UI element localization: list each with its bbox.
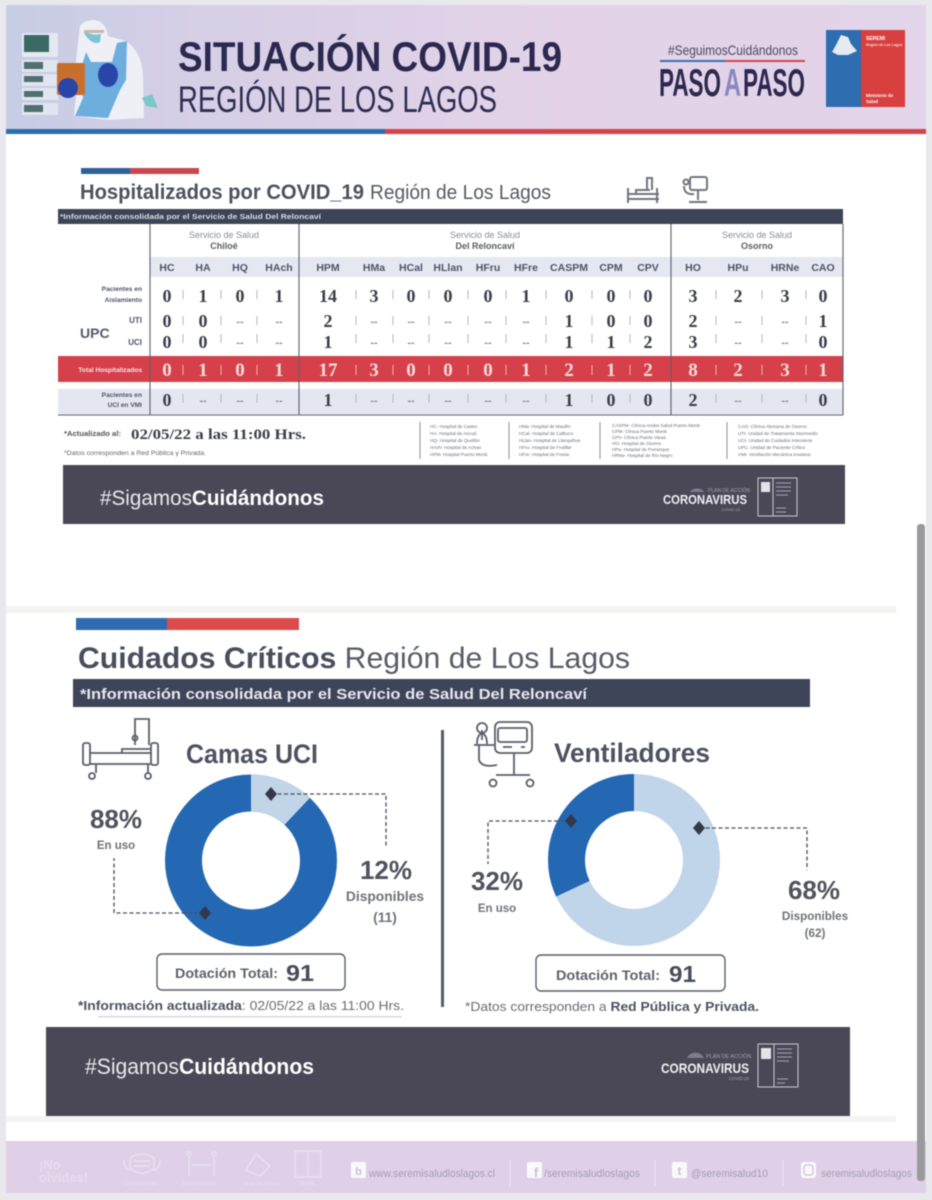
campaign logo: Paso a Paso: PASO	[743, 62, 805, 105]
legend of abbreviations: HFru- Hospital de Frutillar	[519, 445, 572, 450]
row: UCI: --	[484, 337, 492, 349]
icon: ventilate window	[295, 1151, 321, 1177]
column codes: HFru	[476, 262, 500, 274]
row: pacientes en UCI en VMI: --	[734, 395, 742, 407]
service headers: Servicio de Salud	[189, 230, 259, 240]
social: instagram	[801, 1162, 912, 1180]
update note: 02/05/22 a las 11:00 Hrs.	[131, 427, 306, 443]
row: pacientes en aislamiento: 3	[688, 286, 698, 306]
row: UTI: 1	[564, 311, 574, 331]
logo: SEREMI Ministerio de Salud: SEREMI	[866, 36, 886, 42]
icon captions: Lavar tus manos	[243, 1181, 280, 1187]
logo: SEREMI Ministerio de Salud: Ministerio de	[866, 93, 894, 98]
icon: mask	[124, 1154, 160, 1173]
row: UTI: --	[522, 316, 530, 328]
title	[178, 32, 562, 120]
logo: plan de acción coronavirus	[661, 1044, 798, 1087]
column codes: HA	[195, 262, 211, 274]
row: UTI: --	[734, 316, 742, 328]
subtitle: REGIÓN DE LOS LAGOS	[178, 79, 497, 120]
callout: 88% en uso	[90, 804, 211, 920]
campaign logo: Paso a Paso: PASO	[659, 62, 721, 105]
row labels: Total Hospitalizados	[78, 367, 142, 374]
legend of abbreviations: HAch- Hospital de Achao	[430, 445, 482, 450]
legend of abbreviations: UCI- Unidad de Cuidados Intensivos	[738, 438, 813, 443]
row: total hospitalizados: 17	[318, 360, 338, 381]
service headers	[189, 230, 792, 251]
row: UTI: --	[484, 316, 492, 328]
icon: distance	[187, 1152, 216, 1176]
logo: plan de acción coronavirus: PLAN DE ACCIÓN	[708, 487, 750, 494]
legend of abbreviations: CAO- Clínica Alemana de Osorno	[738, 424, 807, 429]
icon: ICU bed	[83, 719, 158, 779]
row: pacientes en aislamiento: 0	[236, 286, 244, 306]
column codes: CASPM	[550, 262, 588, 274]
row: pacientes en aislamiento: 1	[198, 286, 208, 306]
box: dotación total 91	[157, 954, 345, 990]
row: pacientes en aislamiento: 0	[162, 286, 172, 306]
service headers: Osorno	[741, 241, 773, 251]
social: twitter: @seremisalud10	[691, 1168, 768, 1180]
column codes: HQ	[232, 262, 248, 274]
logo: plan de acción coronavirus: CORONAVIRUS	[661, 1060, 749, 1076]
logo: plan de acción coronavirus: CORONAVIRUS	[663, 492, 747, 507]
social: facebook: f	[534, 1165, 539, 1180]
row: pacientes en UCI en VMI: 0	[644, 390, 652, 410]
legend of abbreviations: CASPM- Clínica Andes Salud Puerto Montt	[612, 423, 701, 428]
legend of abbreviations: HPM- Hospital Puerto Montt	[430, 452, 488, 457]
row: pacientes en aislamiento: 0	[484, 286, 492, 306]
legend of abbreviations: HPu- Hospital de Purranque	[612, 447, 670, 452]
legend of abbreviations: VMI- Ventilación Mecánica Invasiva	[738, 452, 811, 457]
row: total hospitalizados: 2	[733, 360, 743, 381]
icon captions: Distancia física	[182, 1181, 216, 1187]
row: pacientes en UCI en VMI: --	[275, 395, 283, 407]
column codes: HLlan	[433, 262, 463, 274]
row: pacientes en UCI en VMI: --	[444, 395, 452, 407]
heading: camas UCI: Camas UCI	[186, 739, 318, 769]
logo: SEREMI Ministerio de Salud: Región de Los Lagos	[866, 43, 902, 47]
social: facebook: /seremisaludloslagos	[544, 1168, 640, 1180]
divider between charts	[441, 730, 444, 1007]
row: UCI: --	[407, 337, 415, 349]
legend of abbreviations: HRNe- Hospital de Río Negro	[612, 453, 673, 458]
row labels	[78, 286, 142, 409]
row: UCI: --	[444, 337, 452, 349]
row labels: Pacientes en	[102, 286, 142, 293]
panel: cuidados críticos section	[46, 618, 850, 1116]
social: facebook	[527, 1162, 640, 1180]
panel: hospitalizados table section	[58, 168, 845, 524]
row: pacientes en UCI en VMI: --	[781, 395, 789, 407]
row: pacientes en UCI en VMI: 0	[162, 390, 172, 410]
banner: sigamos cuidándonos 1: #SigamosCuidándonos	[100, 487, 324, 510]
column codes: HCal	[399, 262, 423, 274]
row: total hospitalizados: 0	[443, 360, 453, 381]
legend of abbreviations: HMa- Hospital de Maullín	[519, 424, 571, 429]
column codes: CAO	[811, 262, 835, 274]
update note: *Actualizado al:	[64, 431, 121, 438]
callout: 68% disponibles	[693, 821, 849, 940]
row: pacientes en UCI en VMI: --	[484, 395, 492, 407]
row: UCI: 0	[198, 332, 208, 352]
row: total hospitalizados: 1	[274, 360, 284, 381]
row: pacientes en aislamiento: 2	[734, 286, 742, 306]
row: total hospitalizados: 1	[606, 360, 616, 381]
row: pacientes en UCI en VMI: 0	[606, 390, 616, 410]
update note: *Datos corresponden a Red Pública y Privada.	[64, 450, 206, 457]
row: total hospitalizados: 0	[406, 360, 416, 381]
row: total hospitalizados: 8	[688, 360, 698, 381]
column codes: HFre	[514, 262, 538, 274]
reminder: no olvides: ¡No	[39, 1157, 61, 1172]
row: pacientes en UCI en VMI: --	[199, 395, 207, 407]
column codes: CPM	[599, 262, 623, 274]
banner: sigamos cuidándonos 2	[46, 1027, 850, 1116]
campaign logo: Paso a Paso	[659, 42, 805, 105]
row: total hospitalizados: 2	[643, 360, 653, 381]
row: pacientes en aislamiento: 0	[644, 286, 652, 306]
donut chart: camas UCI	[184, 793, 318, 928]
row: UTI	[162, 311, 828, 331]
row: UTI: 0	[198, 311, 208, 331]
row: pacientes en aislamiento: 1	[274, 286, 284, 306]
column codes: HC	[159, 262, 175, 274]
row: UCI: --	[236, 337, 244, 349]
row: UCI: --	[370, 337, 378, 349]
heading: hospitalizados: Hospitalizados por COVID_19	[80, 181, 364, 204]
icon: hospital bed	[628, 178, 659, 203]
reminder: no olvides: olvides!	[39, 1170, 88, 1185]
callout: 88% en uso: 88%	[90, 804, 142, 834]
service headers: Chiloé	[210, 241, 238, 251]
row labels: UCI	[128, 338, 142, 347]
box: dotación total 91: 91	[669, 961, 696, 987]
icon: hand wash	[246, 1154, 270, 1176]
box: dotación total 91	[536, 955, 725, 991]
callout: 12% disponibles: (11)	[373, 910, 397, 925]
title: SITUACIÓN COVID-19	[178, 32, 562, 80]
row: total hospitalizados: 3	[369, 360, 379, 381]
legend of abbreviations: UTI- Unidad de Tratamiento Intermedio	[738, 431, 818, 436]
callout: 32% en uso	[471, 814, 577, 915]
row: pacientes en aislamiento: 0	[606, 286, 616, 306]
box: dotación total 91: Dotación Total:	[175, 965, 278, 981]
heading: cuidados críticos: Cuidados Críticos Región de Los Lagos	[78, 642, 630, 675]
row: pacientes en aislamiento: 0	[406, 286, 416, 306]
row: UCI: 1	[606, 332, 616, 352]
column codes: HMa	[363, 262, 385, 274]
row labels: UPC	[80, 325, 110, 341]
legend of abbreviations: HO- Hospital de Osorno	[612, 441, 661, 446]
row: UCI: 1	[564, 332, 574, 352]
footnote: información actualizada: *Información actualizada : 02/05/22 a las 11:00 Hrs.	[78, 998, 404, 1013]
row: pacientes en aislamiento: 0	[818, 286, 828, 306]
icon captions	[125, 1181, 315, 1187]
header rule blue and red	[6, 129, 926, 134]
row: pacientes en aislamiento: 0	[444, 286, 452, 306]
info bar: table note: *Información consolidada por el Servicio de Salud Del Reloncaví	[60, 212, 322, 221]
row: UCI: --	[734, 337, 742, 349]
row: UCI	[162, 332, 828, 352]
callout: 68% disponibles: (62)	[805, 927, 825, 940]
column codes: HAch	[265, 262, 293, 274]
box: dotación total 91: Dotación Total:	[556, 967, 660, 983]
row: total hospitalizados: 1	[198, 360, 208, 381]
row: pacientes en UCI en VMI: 0	[818, 390, 828, 410]
row: total hospitalizados: 0	[235, 360, 245, 381]
footer band	[6, 1141, 926, 1193]
illustration: health worker with monitors	[22, 20, 158, 120]
callout: 12% disponibles	[265, 787, 424, 925]
row labels: Pacientes en	[102, 392, 142, 399]
row: UCI: 3	[688, 332, 698, 352]
row: UTI: 2	[324, 311, 332, 331]
row: total hospitalizados: 1	[818, 360, 828, 381]
service headers: Servicio de Salud	[450, 230, 520, 240]
social: website: b	[355, 1166, 362, 1178]
logo: plan de acción coronavirus: PLAN DE ACCIÓN	[706, 1053, 751, 1060]
row: pacientes en aislamiento: 3	[780, 286, 790, 306]
section accent bar	[76, 618, 299, 630]
row: total hospitalizados: 0	[483, 360, 493, 381]
row: UTI: 0	[606, 311, 616, 331]
column codes: CPV	[637, 262, 659, 274]
row: pacientes en UCI en VMI: --	[407, 395, 415, 407]
row: UTI: 0	[644, 311, 652, 331]
row: UCI: --	[522, 337, 530, 349]
row: UTI: --	[781, 316, 789, 328]
heading: hospitalizados: Región de Los Lagos	[370, 182, 551, 204]
logo: plan de acción coronavirus: COVID-19	[729, 1076, 750, 1081]
service headers: Del Reloncaví	[455, 241, 515, 251]
row: UTI: 2	[688, 311, 698, 331]
social: twitter	[672, 1162, 768, 1180]
row: total hospitalizados	[162, 360, 828, 381]
logo: plan de acción coronavirus	[663, 478, 797, 516]
logo: SEREMI Ministerio de Salud: Salud	[866, 99, 878, 104]
legend of abbreviations: UPC- Unidad de Paciente Crítico	[738, 445, 806, 450]
row: pacientes en UCI en VMI	[162, 390, 828, 410]
legend of abbreviations: HQ- Hospital de Quellón	[430, 438, 480, 443]
callout: 12% disponibles: 12%	[360, 855, 412, 885]
callout: 68% disponibles: Disponibles	[782, 910, 849, 923]
row: pacientes en UCI en VMI: --	[370, 395, 378, 407]
row: UCI: --	[781, 337, 789, 349]
panel: ventiladores	[465, 722, 849, 1014]
row: pacientes en aislamiento	[162, 286, 828, 306]
icon: ventilator	[684, 177, 707, 202]
row: total hospitalizados: 3	[780, 360, 790, 381]
legend of abbreviations: CPM- Clínica Puerto Montt	[612, 429, 667, 434]
row: UCI: 0	[162, 332, 172, 352]
row: UTI: --	[370, 316, 378, 328]
legend of abbreviations: CPV- Clínica Puerto Varas	[612, 435, 666, 440]
heading: hospitalizados	[80, 181, 551, 204]
row: UCI: 0	[818, 332, 828, 352]
row: pacientes en UCI en VMI: --	[522, 395, 530, 407]
row: UCI: 1	[324, 332, 332, 352]
column codes: HRNe	[771, 262, 799, 274]
row: UCI: --	[275, 337, 283, 349]
row: pacientes en UCI en VMI: 2	[688, 390, 698, 410]
header banner	[6, 5, 926, 134]
legend of abbreviations: HA- Hospital de Ancud	[430, 431, 477, 436]
callout: 32% en uso: En uso	[478, 903, 516, 915]
legend of abbreviations: HC- Hospital de Castro	[430, 424, 478, 429]
scrollbar	[917, 524, 925, 1181]
banner: sigamos cuidándonos 1	[63, 465, 845, 524]
row: UCI: 2	[644, 332, 652, 352]
column codes	[159, 262, 835, 274]
social: website	[351, 1162, 495, 1180]
row: total hospitalizados: 1	[521, 360, 531, 381]
campaign logo: Paso a Paso: #SeguimosCuidándonos	[668, 42, 798, 58]
icon captions: Usa mascarilla	[125, 1181, 158, 1187]
callout: 68% disponibles: 68%	[788, 875, 840, 905]
row: UTI: --	[444, 316, 452, 328]
row: pacientes en UCI en VMI: 1	[564, 390, 574, 410]
column codes: HO	[685, 262, 701, 274]
row labels: UTI	[129, 316, 142, 325]
row: UTI: --	[236, 316, 244, 328]
row: pacientes en aislamiento: 14	[319, 286, 337, 306]
legend of abbreviations: HLlan- Hospital de Llanquihue	[519, 438, 581, 443]
row: UTI: 1	[818, 311, 828, 331]
social: twitter: t	[678, 1164, 682, 1178]
row: total hospitalizados: 2	[564, 360, 574, 381]
box: dotación total 91: 91	[286, 960, 314, 986]
legend of abbreviations: HCal- Hospital de Calbuco	[519, 431, 574, 436]
reminder: no olvides	[39, 1151, 321, 1187]
row labels: Aislamiento	[105, 297, 142, 304]
logo: plan de acción coronavirus: COVID-19	[722, 507, 741, 512]
column codes: HPM	[316, 262, 340, 274]
callout: 32% en uso: 32%	[471, 866, 523, 896]
row: total hospitalizados: 0	[162, 360, 172, 381]
row: pacientes en aislamiento: 3	[370, 286, 378, 306]
info bar: *Información consolidada por el Servicio de Salud Del Reloncaví	[80, 687, 588, 703]
row: pacientes en UCI en VMI: 1	[324, 390, 332, 410]
icon: ventilator	[474, 722, 534, 786]
legend of abbreviations: HFre- Hospital de Fresia	[519, 452, 569, 457]
column codes: HPu	[728, 262, 748, 274]
campaign logo: Paso a Paso: A	[724, 62, 741, 105]
row: UTI: --	[275, 316, 283, 328]
row: pacientes en aislamiento: 0	[564, 286, 574, 306]
row: UTI: --	[407, 316, 415, 328]
banner: sigamos cuidándonos 2: #SigamosCuidándonos	[85, 1054, 314, 1079]
panel: camas UCI	[78, 719, 424, 1013]
logo: SEREMI Ministerio de Salud	[826, 30, 905, 107]
row: pacientes en UCI en VMI: --	[236, 395, 244, 407]
table	[58, 224, 843, 415]
service headers: Servicio de Salud	[722, 230, 792, 240]
footnote: datos: *Datos corresponden a Red Pública y Privada.	[465, 999, 759, 1014]
row labels: UCI en VMI	[108, 402, 142, 409]
row: UTI: 0	[162, 311, 172, 331]
social: website: www.seremisaludloslagos.cl	[368, 1168, 495, 1180]
row: pacientes en aislamiento: 1	[522, 286, 530, 306]
callout: 88% en uso: En uso	[97, 840, 135, 852]
icon captions: Ventila	[299, 1181, 315, 1187]
social: instagram: seremisaludloslagos	[821, 1168, 912, 1180]
section accent bar	[81, 168, 199, 174]
callout: 12% disponibles: Disponibles	[346, 889, 424, 904]
legend of abbreviations	[420, 422, 818, 459]
update note	[64, 427, 306, 457]
info bar	[73, 679, 810, 707]
info bar: table note	[58, 209, 843, 224]
heading: ventiladores: Ventiladores	[554, 738, 710, 768]
donut chart: ventiladores	[566, 792, 702, 928]
